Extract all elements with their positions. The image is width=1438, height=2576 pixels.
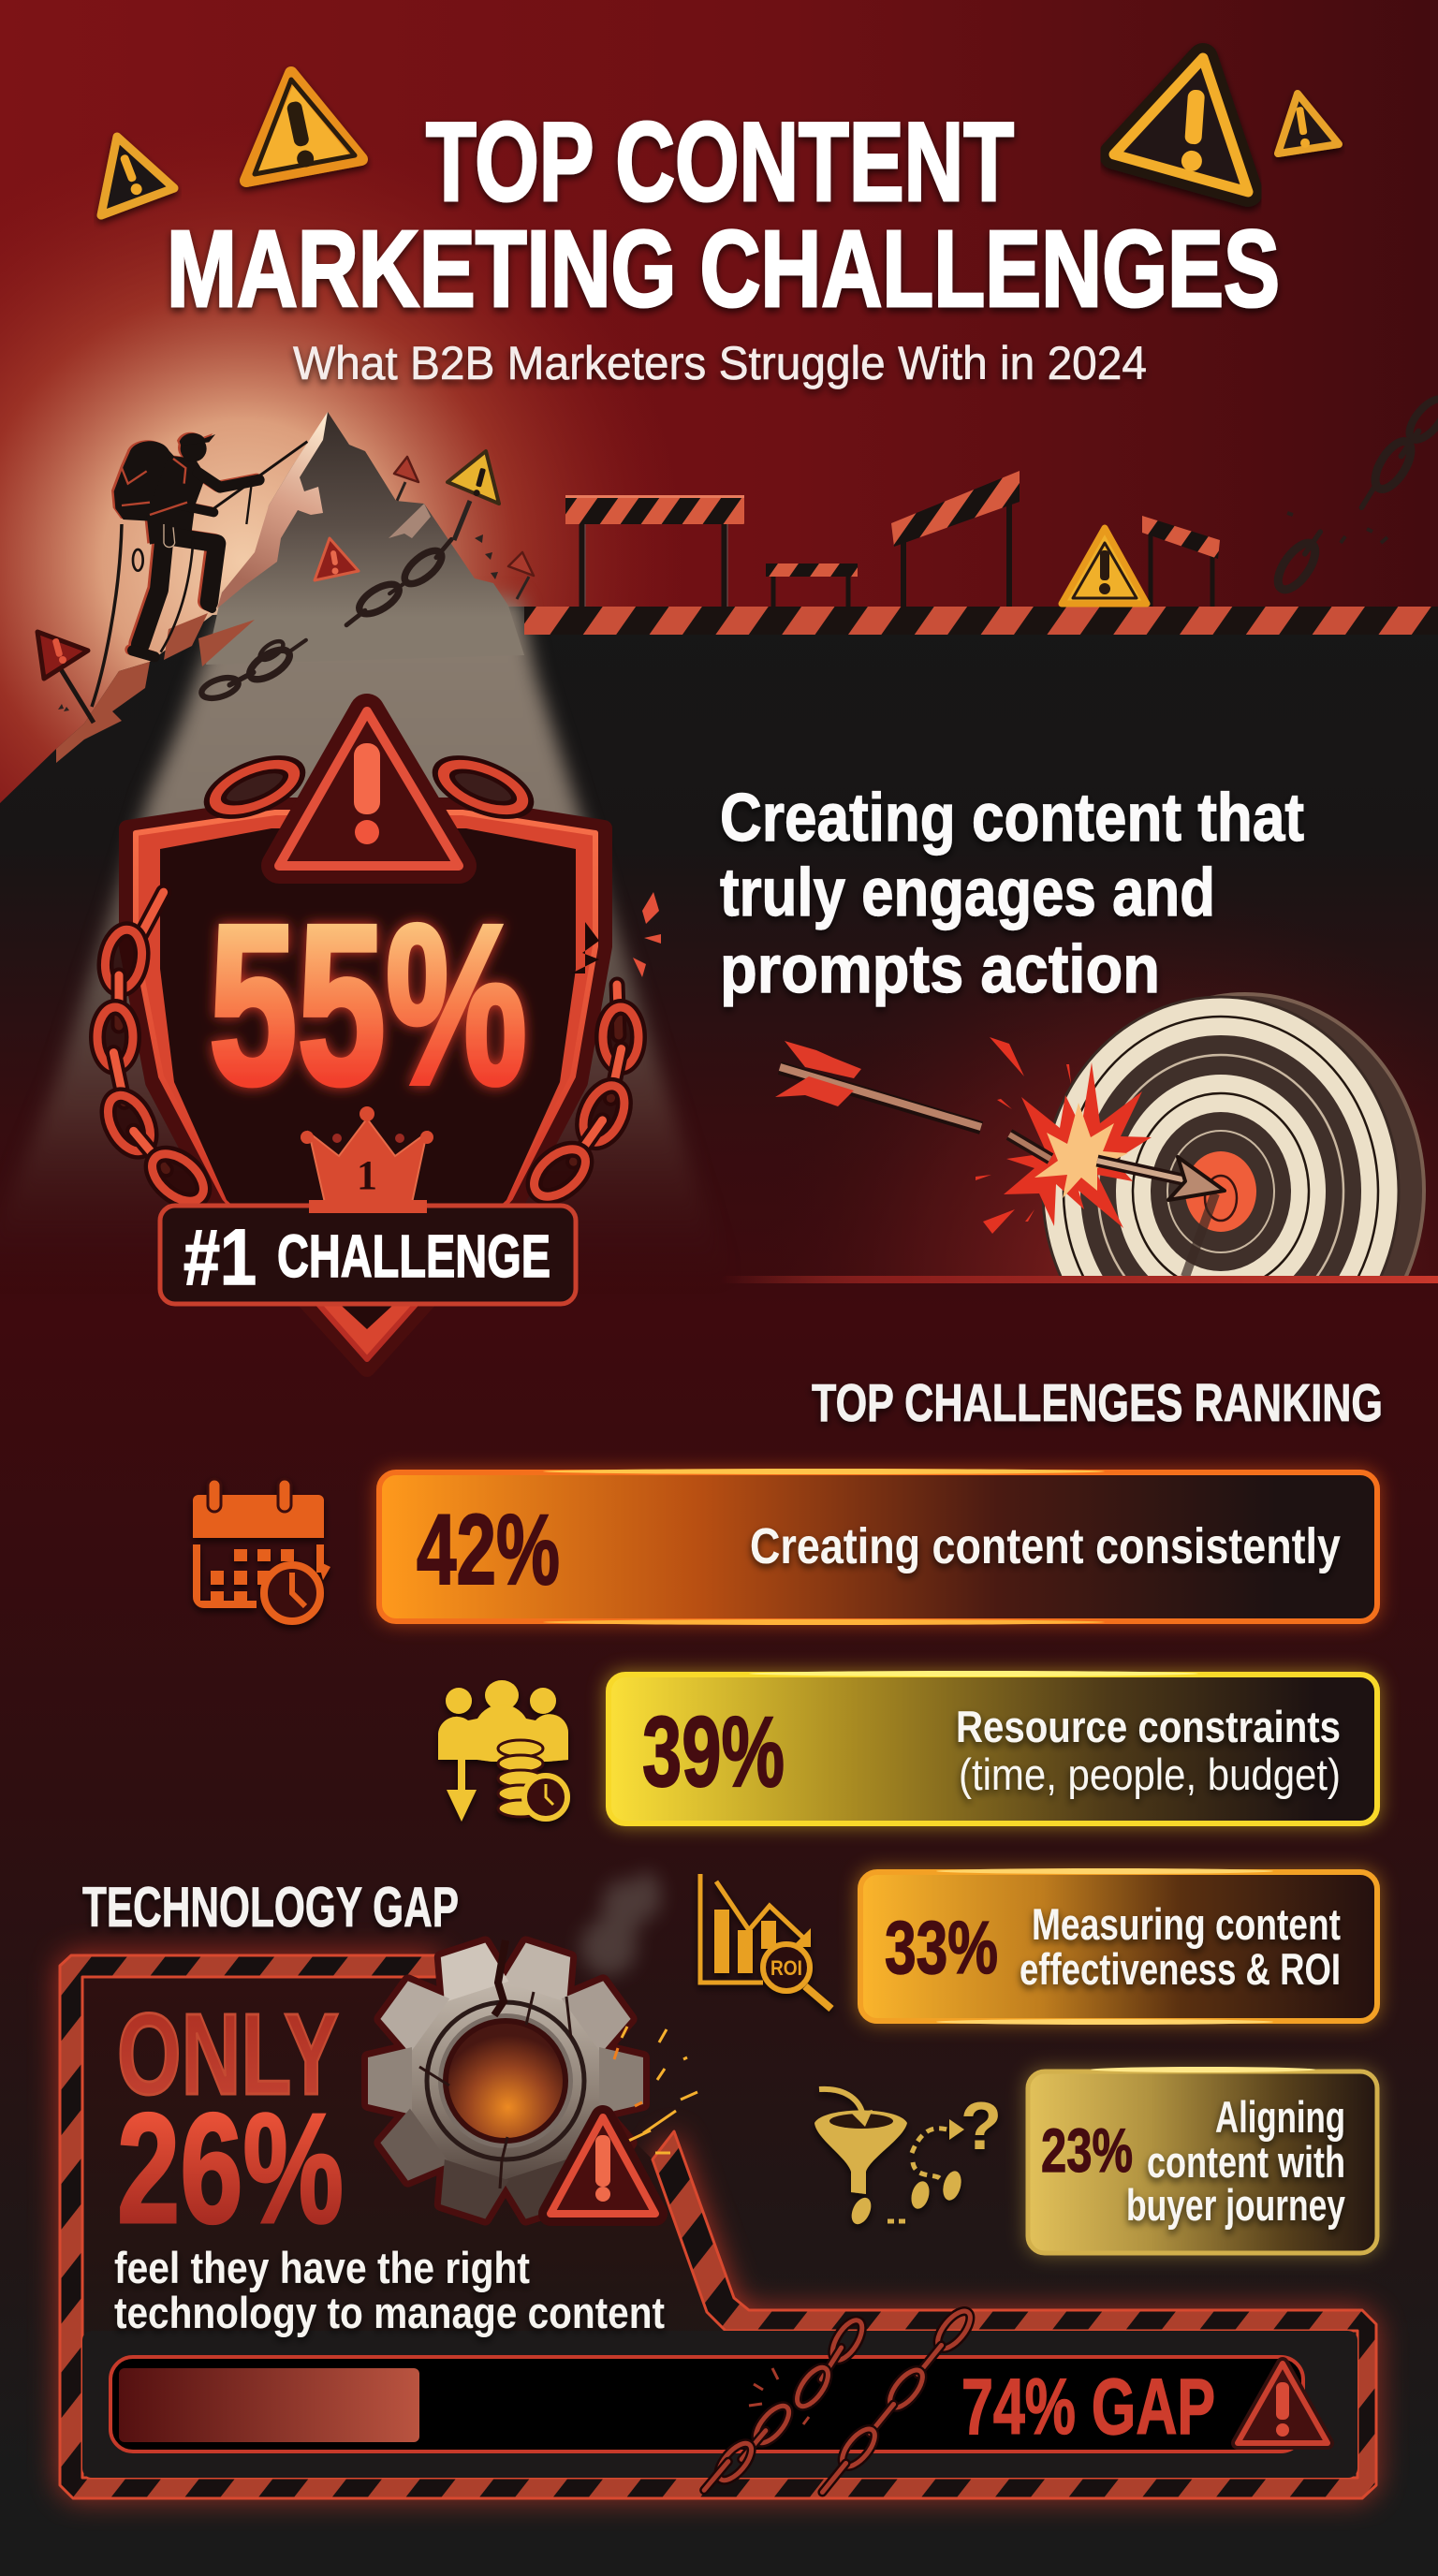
badge text: #1 bbox=[183, 1213, 257, 1301]
background: red header bbox=[0, 0, 1438, 842]
heading: technology gap: TECHNOLOGY GAP bbox=[82, 1876, 459, 1939]
background: dark lower body bbox=[0, 607, 1438, 2576]
smoke bbox=[580, 1872, 661, 1975]
label: effectiveness & ROI bbox=[1020, 1944, 1341, 1994]
icon: yellow warning left bbox=[246, 73, 361, 181]
label: Resource constraints bbox=[956, 1702, 1341, 1751]
icon: warning gap bbox=[1238, 2364, 1328, 2443]
barrier 1 bbox=[565, 495, 744, 607]
hazard border bbox=[60, 1955, 1376, 2498]
hazard strip ground bbox=[524, 607, 1438, 635]
label bbox=[1020, 1899, 1341, 1994]
sign: red upper bbox=[394, 457, 418, 501]
shield body bbox=[127, 806, 604, 1368]
chains across bar bbox=[704, 2305, 976, 2493]
text: technology statement: feel they have the right bbox=[114, 2243, 530, 2292]
icon: small warning right bbox=[1278, 94, 1339, 154]
barrier 4 tilted bbox=[1142, 516, 1220, 607]
background: peach glow behind climber bbox=[0, 94, 712, 842]
headline: #1 challenge description: prompts action bbox=[720, 932, 1160, 1007]
arrow shaft back bbox=[780, 1067, 981, 1128]
stat: 55%: 55% bbox=[209, 878, 527, 1132]
label: content with bbox=[1147, 2137, 1345, 2187]
headline: #1 challenge description bbox=[720, 781, 1304, 1007]
icon: people and coins bbox=[438, 1680, 568, 1822]
rope bbox=[92, 524, 122, 707]
barrier 3 tilted bbox=[891, 471, 1020, 607]
warning triangle on shield bbox=[279, 711, 459, 866]
panel glow bbox=[60, 1955, 1376, 2498]
sparks bbox=[614, 2027, 697, 2153]
mountain right facet bbox=[389, 504, 431, 538]
value: 39% bbox=[642, 1695, 785, 1808]
signs on mountain bbox=[37, 451, 534, 723]
icon: crown bbox=[301, 1106, 433, 1214]
arrow fletching bbox=[775, 1041, 861, 1106]
progress bar bbox=[110, 2357, 1303, 2452]
sign: red right bbox=[508, 552, 534, 599]
panel: #1 challenge shield bbox=[97, 711, 661, 1368]
badge: #1 challenge bbox=[160, 1200, 576, 1304]
sparks bbox=[976, 1037, 1071, 1234]
headline: #1 challenge description: truly engages and bbox=[720, 856, 1215, 930]
sign: red left bbox=[37, 632, 94, 723]
label: buyer journey bbox=[1126, 2180, 1345, 2230]
value: 42% bbox=[417, 1493, 560, 1605]
value: 33% bbox=[885, 1906, 998, 1989]
chains around shield bbox=[97, 755, 638, 1210]
icon: calendar clock bbox=[193, 1479, 330, 1621]
icon: ROI chart bbox=[700, 1874, 831, 2009]
icon: crown: 1 bbox=[357, 1152, 377, 1198]
chain on mountain bbox=[199, 539, 451, 702]
background: spotlight beam bbox=[0, 599, 740, 1310]
bar: 33% measuring content effectiveness bbox=[858, 1868, 1380, 2025]
bar: 42% creating content consistently bbox=[376, 1469, 1380, 1625]
label bbox=[1126, 2092, 1345, 2230]
bar: 39% resource constraints bbox=[606, 1671, 1380, 1826]
sign: yellow bbox=[448, 451, 499, 540]
value: 23% bbox=[1041, 2115, 1133, 2185]
icon: large warning right bbox=[1114, 58, 1248, 192]
shards bbox=[633, 892, 661, 977]
icon: ground warning bbox=[1062, 528, 1147, 604]
title: TOP CONTENT bbox=[426, 99, 1014, 225]
text: technology statement bbox=[114, 2243, 665, 2337]
inner plate bbox=[82, 2331, 1357, 2478]
label: Aligning bbox=[1215, 2092, 1345, 2142]
label: Measuring content bbox=[1032, 1899, 1341, 1949]
label bbox=[956, 1702, 1341, 1799]
burst bbox=[1004, 1062, 1152, 1228]
badge text bbox=[183, 1213, 550, 1301]
headline: #1 challenge description: Creating content that bbox=[720, 781, 1304, 856]
text: technology statement: technology to manage content bbox=[114, 2288, 665, 2337]
icon: small warning left bbox=[101, 137, 174, 215]
rock facets bbox=[56, 613, 255, 763]
label: (time, people, budget) bbox=[959, 1749, 1341, 1799]
stat: only: ONLY bbox=[117, 1991, 339, 2119]
arrow front bbox=[1009, 1134, 1225, 1200]
illustration: target bbox=[1041, 992, 1426, 1276]
label: 74% gap: 74% GAP bbox=[961, 2363, 1215, 2451]
mountain lit face bbox=[217, 412, 328, 608]
ground line bbox=[721, 1276, 1438, 1283]
panel: technology gap bbox=[60, 1955, 1376, 2498]
panel interior bbox=[82, 1977, 1357, 2478]
icon: warning on gear bbox=[550, 2117, 655, 2214]
stat: 26%: 26% bbox=[117, 2082, 344, 2256]
sign: red on mountain bbox=[315, 538, 359, 580]
icon: funnel and footsteps: ? bbox=[961, 2089, 1002, 2164]
bar: 23% aligning content bbox=[1025, 2067, 1380, 2256]
title bbox=[167, 99, 1280, 329]
subtitle: What B2B Marketers Struggle With in 2024 bbox=[293, 337, 1147, 389]
filled portion 26% bbox=[119, 2368, 419, 2442]
badge text: CHALLENGE bbox=[277, 1222, 550, 1290]
climber silhouette bbox=[111, 432, 307, 657]
icon: funnel and footsteps bbox=[814, 2089, 1002, 2227]
target glow bbox=[749, 889, 1438, 1280]
illustration: arrow and burst bbox=[775, 1037, 1225, 1234]
icon: ROI chart: ROI bbox=[770, 1956, 802, 1980]
illustration: mountain bbox=[56, 412, 524, 763]
broken chain right bbox=[1271, 393, 1438, 595]
icon: broken gear bbox=[368, 1939, 643, 2222]
barrier 2 bbox=[766, 564, 858, 607]
rock debris bbox=[58, 534, 498, 711]
